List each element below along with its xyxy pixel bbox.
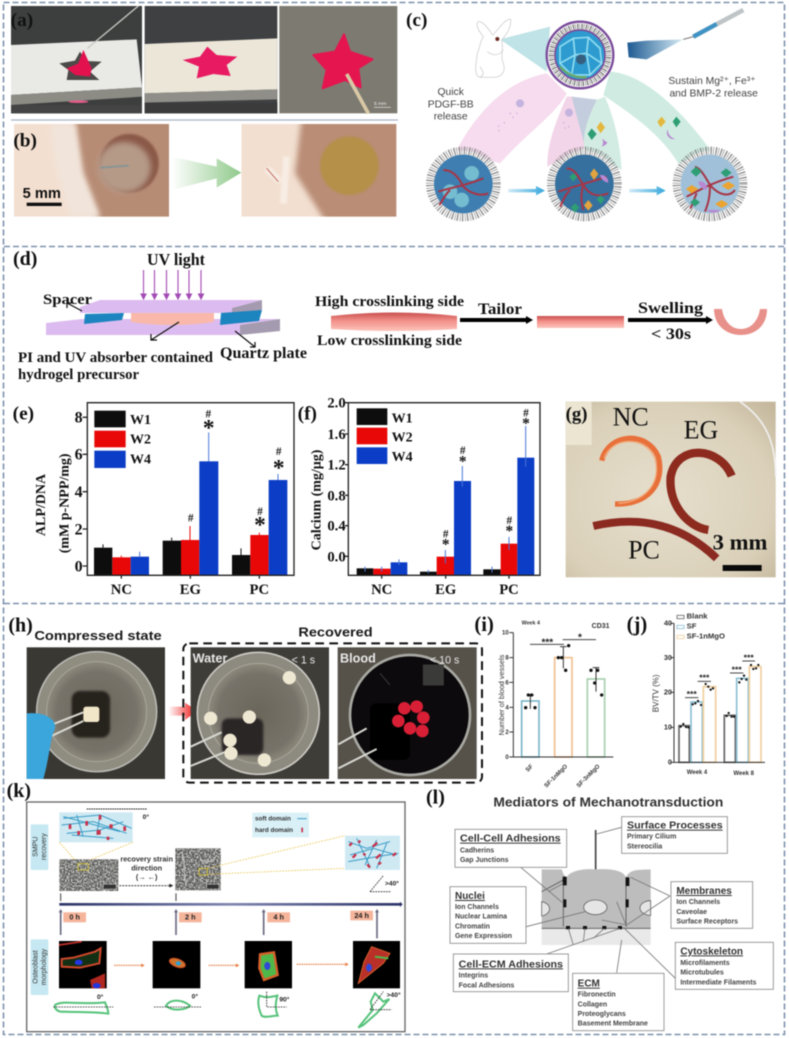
y tick labels: 2 (75, 521, 83, 538)
significance marks (188, 409, 284, 538)
y tick labels: 8 (75, 410, 83, 427)
box nuclei: Chromatin (455, 923, 490, 930)
y axis title: Calcium (mg/μg) (310, 449, 325, 550)
box ECM: Proteoglycans (578, 1011, 626, 1018)
box cytoskeleton: Microfilaments (680, 960, 730, 967)
angle marker greater than 40 degrees: >40° (385, 879, 399, 887)
SMPU recovery tag: SMPU (32, 837, 39, 857)
significance: *** (732, 664, 742, 674)
cell outline 0 degrees second: 0° (192, 992, 198, 1000)
box cytoskeleton: Microtubules (680, 970, 724, 977)
text: sustained release: and BMP-2 release (669, 89, 758, 100)
legend (94, 411, 151, 468)
panel b: wound before and after filling (13, 117, 403, 223)
box cytoskeleton: Intermediate Filaments (680, 979, 757, 986)
arrow: stage 1 to 2 (508, 186, 545, 195)
tick labels: 30 (664, 653, 672, 662)
time tag 4 h: 4 h (273, 913, 284, 922)
y tick labels: 1.6 (327, 427, 346, 443)
timeline (59, 893, 403, 938)
panel k: SMPU recovery and osteoblast morphology (7, 780, 405, 1032)
legend soft and hard domain: soft domain (255, 816, 291, 823)
y tick labels: 1.2 (327, 458, 346, 474)
y tick labels: 0 (75, 558, 83, 575)
text: quick PDGF-BB release: Quick (437, 87, 465, 98)
y tick labels: 0.0 (327, 549, 346, 565)
chart e: ALP/DNA bar chart (13, 403, 294, 598)
released particles (498, 99, 681, 147)
label f: (f) (298, 403, 317, 424)
spacer label: Spacer (43, 292, 92, 308)
legend soft and hard domain (252, 813, 309, 837)
y tick labels: 4 (75, 484, 83, 501)
label a: (a) (11, 10, 33, 31)
top quartz plate (80, 300, 262, 315)
bars (679, 667, 761, 762)
box surface processes: Surface Processes (627, 821, 723, 832)
swelling arrow (628, 316, 713, 324)
category labels: SF-1nMgO (544, 764, 569, 789)
significance marks: * (522, 415, 530, 432)
box cell-ECM adhesions (453, 954, 568, 992)
tick labels: 2 (505, 730, 509, 736)
NC strip (602, 438, 660, 504)
cell outline greater than 40 degrees: >40° (387, 991, 401, 999)
significance: *** (541, 638, 553, 649)
box cell-ECM adhesions: Integrins (459, 972, 488, 979)
tick labels: 4 (505, 705, 509, 711)
high crosslinking label: High crosslinking side (315, 294, 464, 310)
EG strip (670, 453, 732, 530)
x tick labels: EG (180, 582, 201, 598)
y axis title: (mM p-NPP/mg) (57, 453, 72, 553)
text: sustained release: Sustain Mg²⁺, Fe³⁺ (668, 76, 756, 87)
curved strip (714, 309, 767, 335)
y title: BV/TV (%) (652, 674, 661, 712)
significance marks: * (273, 456, 284, 482)
box surface processes (622, 817, 727, 853)
dashed orange arrows (114, 962, 349, 967)
angle marker greater than 40 degrees (370, 876, 399, 892)
cell outline 90 degrees: 90° (279, 996, 290, 1004)
significance marks: * (254, 512, 266, 538)
label e: (e) (13, 403, 34, 424)
zero degree marker (87, 809, 149, 821)
SEM image 0 h (59, 842, 133, 891)
significance: *** (699, 673, 710, 683)
x tick labels: NC (111, 582, 132, 598)
cell diagram (542, 830, 651, 945)
y axis title: ALP/DNA (34, 474, 49, 536)
panel a: star hydrogel photos (11, 6, 397, 113)
oriented network inset (345, 836, 400, 870)
tick labels: 20 (664, 688, 672, 697)
cell image 24 h (353, 941, 400, 988)
box ECM: ECM (578, 979, 600, 990)
x tick labels: EG (435, 582, 456, 598)
box cell-ECM adhesions: Cell-ECM Adhesions (459, 959, 563, 970)
box membranes (671, 882, 753, 928)
legend: SF-1nMgO (687, 632, 725, 641)
category labels: SF-3nMgO (576, 764, 602, 789)
tailor label: Tailor (478, 301, 522, 318)
axes frame (83, 403, 294, 579)
significance marks: # (506, 515, 512, 527)
dashed direction arrow (119, 884, 173, 888)
leader lines (520, 827, 675, 978)
photo background (566, 402, 776, 577)
text: quick PDGF-BB release: release (434, 111, 468, 122)
significance marks: * (442, 536, 450, 553)
panel c: growth factor release schematic (406, 10, 758, 217)
photo: skin defect (14, 123, 170, 218)
photo: blood recovered: < 10 s (430, 654, 459, 666)
significance marks: # (443, 528, 449, 540)
label c: (c) (406, 10, 427, 31)
arrow: stage 2 to 3 (629, 186, 666, 195)
x tick labels: PC (250, 582, 269, 598)
axes frame (345, 403, 540, 579)
central scaffold circle (547, 22, 613, 88)
tick labels: 6 (505, 680, 509, 686)
label d: (d) (13, 248, 37, 270)
x tick labels: PC (499, 582, 519, 598)
aligned network inset (59, 812, 133, 842)
cell image 0 h (59, 941, 107, 988)
scale bar 3 mm (713, 529, 768, 571)
significance marks: # (276, 446, 282, 458)
legend: W1 (392, 411, 413, 426)
label i: (i) (474, 614, 494, 636)
title: Mediators of Mechanotransduction (493, 796, 723, 810)
low crosslinking label: Low crosslinking side (317, 333, 462, 349)
arrow: green gradient (172, 157, 241, 190)
precursor label: PI and UV absorber contained (18, 350, 214, 366)
significance marks: # (188, 513, 194, 525)
bars (94, 432, 287, 575)
scaffold stage 3 (677, 151, 743, 217)
bars (357, 426, 534, 575)
significance (685, 652, 755, 699)
cell outline 0 degrees: 0° (97, 993, 104, 1001)
legend: W2 (392, 431, 413, 446)
category labels: SF (525, 764, 535, 773)
strip labels: EG (684, 416, 718, 445)
recovery strain text: direction (131, 864, 163, 873)
chart f: calcium bar chart (298, 396, 540, 598)
y tick labels: 6 (75, 447, 83, 464)
tick labels: 10 (664, 723, 672, 732)
box cell-ECM adhesions: Focal Adhesions (459, 982, 514, 989)
precursor label: hydrogel precursor (18, 367, 139, 383)
legend: W2 (130, 432, 151, 447)
significance: * (578, 633, 582, 644)
photo: blood recovered (338, 647, 477, 779)
category labels (525, 764, 602, 789)
significance marks (442, 407, 530, 553)
label k: (k) (7, 780, 31, 802)
cell outline greater than 40 degrees (358, 991, 401, 1028)
box cell-cell adhesions: Cell-Cell Adhesions (460, 834, 561, 845)
heading recovered: Recovered (298, 625, 373, 640)
titles: CD31 (592, 623, 610, 630)
panel l: mediators of mechanotransduction (426, 786, 773, 1031)
photo: water recovered (191, 647, 329, 779)
box cytoskeleton (675, 942, 773, 989)
x tick labels: NC (371, 582, 392, 598)
UV arrows (141, 270, 204, 299)
time tag 4 h (267, 912, 290, 922)
box cytoskeleton: Cytoskeleton (680, 946, 743, 957)
legend: W4 (130, 452, 151, 467)
titles (522, 620, 610, 630)
data points and error bars (524, 644, 603, 709)
significance marks: * (203, 416, 215, 442)
significance marks: # (523, 407, 529, 419)
photo: filled wound (241, 123, 397, 218)
strip labels: NC (613, 402, 649, 431)
cell image 4 h (245, 941, 292, 988)
axes (509, 633, 613, 757)
box nuclei: Nuclei (455, 891, 485, 902)
photo: star mould with injection needle (11, 6, 142, 113)
photo: water recovered: < 1 s (292, 654, 315, 666)
bilayer slab (331, 312, 457, 331)
box cell-cell adhesions: Gap Junctions (460, 857, 509, 864)
cell outline 0 degrees second (154, 992, 202, 1010)
panel d: crosslinking schematic (13, 248, 767, 383)
spacers (84, 310, 262, 325)
bars (522, 658, 605, 757)
strip labels: PC (628, 535, 660, 564)
time label: < 30s (651, 326, 691, 343)
cell image 2 h (153, 941, 200, 988)
scaffold stage 2 (551, 151, 618, 217)
box ECM: Fibronectin (578, 992, 616, 999)
bottom quartz plate (46, 319, 280, 335)
week labels: Week 4 (687, 770, 708, 776)
scale bar 5 mm: 5 mm (23, 186, 61, 202)
box cell-cell adhesions (455, 829, 567, 867)
time tag 0 h: 0 h (69, 913, 80, 922)
photo: blood recovered: Blood (340, 651, 376, 665)
tailor arrow (460, 316, 533, 324)
legend: W1 (130, 413, 151, 428)
pointer arrows (67, 303, 255, 347)
cell outline 90 degrees (258, 992, 290, 1017)
box cell-cell adhesions: Cadherins (460, 847, 494, 854)
text: quick PDGF-BB release: PDGF-BB (428, 99, 474, 110)
significance marks: * (459, 454, 467, 471)
scale bar 3 mm: 3 mm (713, 529, 768, 554)
osteoblast morphology tag (31, 939, 48, 995)
tick labels: 40 (664, 619, 672, 628)
box membranes: Membranes (676, 886, 732, 897)
y title: Number of blood vessels (497, 654, 506, 735)
significance (530, 633, 596, 649)
box membranes: Caveolae (676, 909, 707, 916)
week labels: Week 8 (733, 771, 755, 777)
box nuclei: Gene Expression (455, 933, 512, 940)
hydrogel precursor (131, 313, 214, 325)
y tick labels: 0.4 (327, 519, 346, 535)
chart j: BV/TV bar chart (627, 612, 765, 777)
legend: SF (687, 622, 697, 631)
UV light label: UV light (147, 250, 205, 269)
photo: filled pink star (145, 6, 277, 113)
label l: (l) (426, 786, 445, 808)
week labels (687, 770, 755, 777)
time tag 24 h (350, 911, 373, 920)
recovery strain text: recovery strain (120, 855, 173, 864)
significance marks: # (205, 409, 211, 421)
SEM image 2 h (175, 836, 345, 890)
box ECM: Collagen (578, 1001, 607, 1008)
icon: rabbit (476, 19, 511, 77)
box nuclei: Nuclear Lamina (455, 914, 507, 921)
photo: compressed dish (27, 647, 165, 779)
heading compressed state: Compressed state (34, 628, 162, 643)
data points (679, 664, 759, 728)
label h: (h) (8, 615, 33, 637)
box surface processes: Stereocilia (627, 844, 662, 851)
tailored strip (537, 316, 624, 328)
icon: syringe (627, 10, 743, 59)
PC strip (593, 522, 717, 558)
photo: water recovered: Water (193, 651, 227, 665)
recovery strain text: (→ ←) (136, 872, 158, 881)
significance: *** (687, 689, 697, 699)
scaffold stage 1 (430, 151, 497, 217)
legend soft and hard domain: hard domain (255, 827, 293, 834)
tick labels: 0 (668, 758, 672, 767)
photo: star held on stick: 5 mm (374, 101, 386, 107)
panel g: curved strip photo (566, 402, 776, 577)
time tag 2 h (179, 912, 202, 922)
tick labels: 8 (505, 656, 509, 662)
panel h: compressed and recovered scaffolds (8, 615, 482, 783)
significance marks: * (505, 523, 513, 540)
y tick labels: 0.8 (327, 488, 346, 504)
titles: Week 4 (522, 620, 540, 626)
osteoblast morphology tag: morphology (41, 948, 48, 985)
release lobes (457, 27, 712, 170)
label j: (j) (627, 614, 647, 636)
box membranes: Surface Receptors (676, 919, 738, 926)
chart i: blood vessels bar chart (474, 614, 613, 789)
frame (27, 802, 405, 1032)
photo: star held on stick (279, 6, 397, 113)
tick labels: 10 (502, 631, 509, 637)
legend: Blank (687, 612, 708, 621)
swelling label: Swelling (638, 300, 703, 317)
box ECM: Basement Membrane (578, 1021, 648, 1028)
legend (357, 408, 413, 465)
axes (670, 623, 765, 762)
box nuclei (450, 887, 526, 943)
significance: *** (744, 652, 754, 662)
time tag 2 h: 2 h (185, 913, 196, 922)
significance marks: # (257, 506, 263, 518)
box membranes: Ion Channels (676, 899, 720, 906)
time tag 24 h: 24 h (354, 911, 370, 920)
label g: (g) (566, 404, 587, 425)
zero degree marker: 0° (143, 813, 149, 821)
tick labels: 0 (505, 755, 509, 761)
dashed recovered frame (183, 643, 482, 783)
SMPU recovery tag: recovery (41, 833, 48, 860)
legend: W4 (392, 450, 413, 465)
y tick labels: 2.0 (327, 396, 346, 412)
significance marks: # (460, 445, 466, 457)
box ECM (573, 973, 664, 1031)
label b: (b) (13, 131, 37, 152)
cell outline 0 degrees (53, 993, 113, 1014)
quartz plate label: Quartz plate (220, 345, 307, 362)
legend (677, 612, 725, 641)
osteoblast morphology tag: Osteoblast (32, 950, 39, 984)
red arrow (168, 703, 197, 720)
box surface processes: Primary Cilium (627, 834, 676, 841)
time tag 0 h (63, 912, 86, 922)
box nuclei: Ion Channels (455, 904, 499, 911)
SMPU recovery tag (31, 824, 48, 870)
